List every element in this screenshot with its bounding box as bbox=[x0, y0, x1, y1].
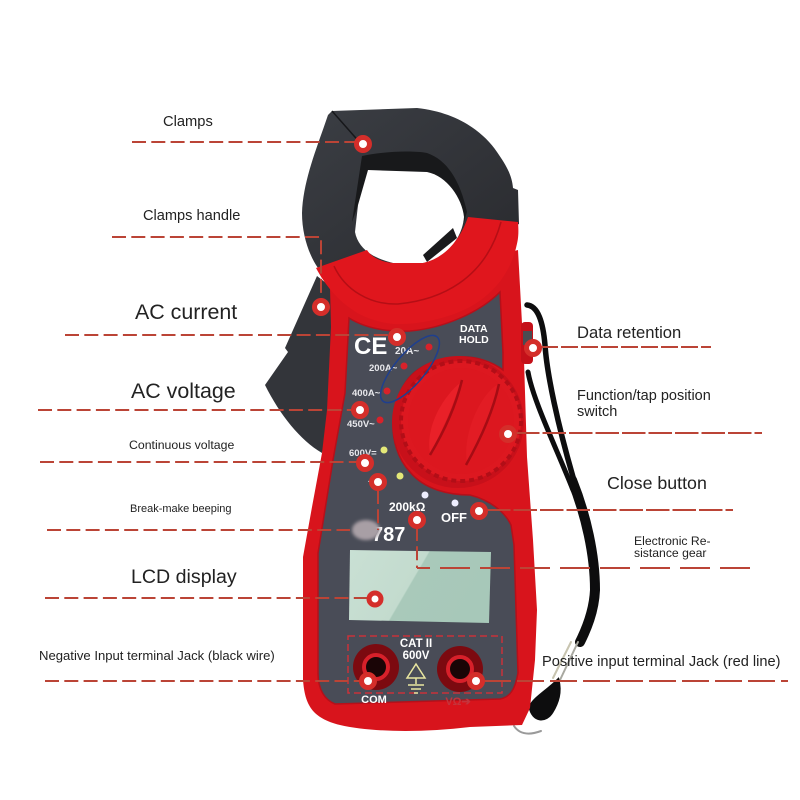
label: data retention: Data retention bbox=[577, 323, 681, 342]
label: continuous voltage: Continuous voltage bbox=[129, 438, 234, 452]
off label: OFF bbox=[441, 510, 467, 525]
clamp jaws bbox=[302, 108, 519, 275]
meter body bbox=[303, 250, 537, 731]
leader lines bbox=[38, 142, 788, 681]
range selector ellipse bbox=[372, 327, 448, 411]
warning triangle and ground bbox=[407, 664, 425, 693]
LCD display screen bbox=[349, 550, 491, 623]
rotary dial bbox=[401, 361, 521, 481]
data hold slider bbox=[521, 322, 533, 364]
label: function switch: Function/tap position bbox=[577, 388, 711, 404]
range labels: 600V= bbox=[349, 448, 377, 459]
inner jaw rim bbox=[352, 152, 467, 222]
label: negative input: Negative Input terminal Jack (black wire) bbox=[39, 648, 275, 663]
range labels: 400A~ bbox=[352, 388, 381, 399]
label: function switch: switch bbox=[577, 404, 617, 420]
callout labels bbox=[39, 114, 780, 670]
range labels: 200A~ bbox=[369, 363, 398, 374]
data hold label: DATA bbox=[460, 323, 488, 335]
label: close button: Close button bbox=[607, 473, 707, 493]
jaw parting line bbox=[332, 111, 362, 145]
range labels: 20A~ bbox=[395, 346, 419, 357]
CAT II label: CAT II bbox=[400, 638, 432, 650]
dial surround bbox=[392, 356, 524, 488]
label: clamps: Clamps bbox=[163, 114, 213, 130]
inner jaw tab bbox=[423, 228, 457, 262]
input terminals block bbox=[348, 636, 502, 708]
label: electronic resistance gear: sistance gear bbox=[634, 546, 706, 560]
label: AC current: AC current bbox=[135, 300, 237, 324]
COM label: COM bbox=[361, 694, 387, 706]
model number: 787 bbox=[372, 524, 405, 546]
200k ohm label: 200kΩ bbox=[389, 500, 426, 514]
label: electronic resistance gear bbox=[634, 534, 711, 560]
rear handle lever bbox=[265, 276, 335, 453]
label: AC voltage: AC voltage bbox=[131, 379, 236, 403]
label: clamps handle: Clamps handle bbox=[143, 208, 240, 224]
callout markers bbox=[314, 138, 540, 688]
CAT II label bbox=[400, 638, 432, 662]
selector indicator dots bbox=[376, 344, 458, 506]
label: break-make beeping: Break-make beeping bbox=[130, 503, 232, 515]
clamp opening bbox=[355, 170, 464, 263]
panel markings bbox=[347, 323, 489, 546]
dashed safety box bbox=[348, 636, 502, 693]
CAT II label: 600V bbox=[403, 650, 430, 662]
top collar bbox=[316, 217, 518, 324]
grey front panel bbox=[318, 292, 518, 704]
CE mark: CE bbox=[354, 333, 387, 360]
data hold label bbox=[459, 323, 489, 346]
data hold label: HOLD bbox=[459, 334, 489, 346]
blurred logo patch bbox=[352, 520, 380, 540]
range labels bbox=[347, 346, 419, 488]
COM jack bbox=[353, 644, 399, 690]
label: electronic resistance gear: Electronic Re- bbox=[634, 534, 711, 548]
wrist strap bbox=[514, 305, 595, 734]
range labels: 450V~ bbox=[347, 419, 375, 430]
meter device bbox=[265, 108, 595, 734]
label: positive input: Positive input terminal Jack (red line) bbox=[542, 654, 780, 670]
label: LCD display: LCD display bbox=[131, 566, 237, 588]
positive jack bbox=[437, 646, 483, 692]
label: function switch bbox=[577, 388, 711, 420]
range labels: + )) bbox=[368, 477, 383, 488]
positive label: VΩ➔ bbox=[445, 696, 471, 708]
